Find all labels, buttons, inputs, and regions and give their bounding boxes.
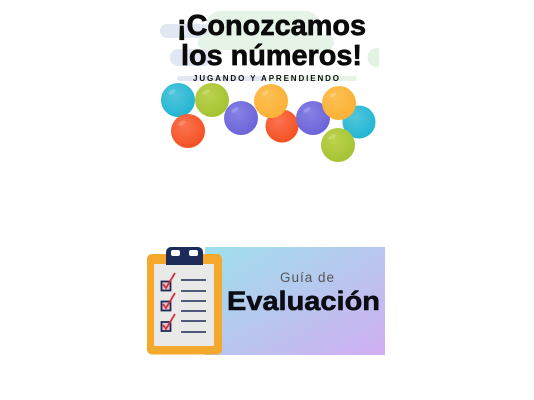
title: los números! — [181, 40, 362, 72]
title — [177, 10, 366, 72]
banner heading — [227, 270, 380, 316]
icon: clipboard — [147, 247, 222, 354]
title: ¡Conozcamos — [177, 10, 366, 42]
banner: guía de evaluación — [205, 247, 385, 355]
subtitle: JUGANDO Y APRENDIENDO — [193, 74, 339, 83]
title background blobs — [160, 11, 379, 81]
banner heading: Evaluación — [227, 286, 380, 316]
balloons — [161, 83, 376, 162]
banner heading: Guía de — [280, 270, 334, 285]
